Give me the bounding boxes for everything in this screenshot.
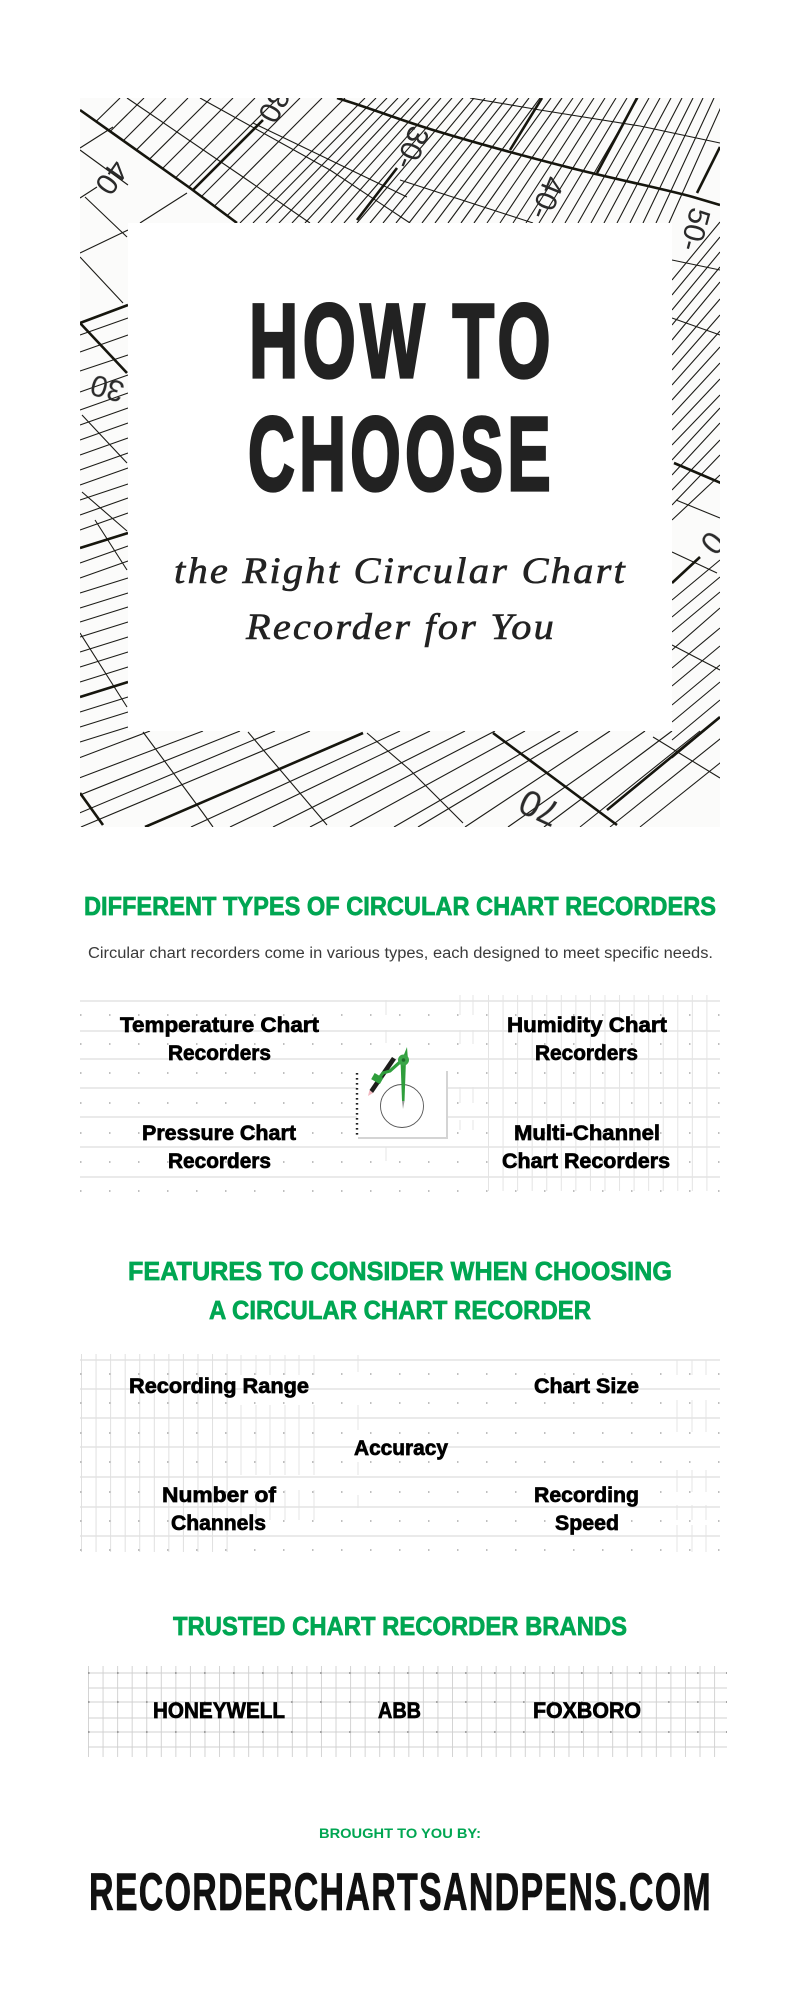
item: temperature chart recorders	[120, 1014, 319, 1065]
item: chart size: Chart Size	[534, 1375, 639, 1398]
heading: different types: DIFFERENT TYPES OF CIRCULAR CHART RECORDERS	[84, 891, 716, 921]
photo digits printed on the chart: 50-	[673, 204, 716, 255]
subtitle	[174, 551, 627, 648]
brand: foxboro: FOXBORO	[533, 1698, 641, 1723]
photo digits printed on the chart: 30-	[388, 121, 435, 174]
brand: honeywell: HONEYWELL	[153, 1698, 285, 1723]
item: pressure chart recorders	[142, 1122, 296, 1173]
panel: types of chart recorders	[80, 995, 720, 1191]
hero: white title panel	[128, 223, 672, 731]
item: recording speed: Recording	[534, 1484, 639, 1507]
heading: features to consider	[128, 1256, 672, 1325]
icon: compass on notepad	[357, 1047, 448, 1139]
item: humidity chart recorders: Humidity Chart	[507, 1014, 667, 1037]
title: how to choose: CHOOSE	[248, 396, 555, 513]
item: temperature chart recorders: Recorders	[168, 1042, 271, 1065]
item: humidity chart recorders: Recorders	[535, 1042, 638, 1065]
item: recording speed: Speed	[555, 1512, 619, 1535]
hero: chart paper photo frame	[80, 98, 720, 827]
photo digits printed on the chart: 40	[88, 154, 134, 200]
panel: features	[80, 1355, 720, 1552]
item: number of channels	[162, 1484, 277, 1535]
brand: abb: ABB	[378, 1698, 421, 1723]
item: multi-channel chart recorders	[502, 1122, 670, 1173]
item: pressure chart recorders: Pressure Chart	[142, 1122, 296, 1145]
heading: features to consider: FEATURES TO CONSIDER WHEN CHOOSING	[128, 1256, 672, 1286]
item: multi-channel chart recorders: Multi-Channel	[514, 1122, 660, 1145]
heading: trusted brands: TRUSTED CHART RECORDER BRANDS	[173, 1611, 627, 1641]
item: multi-channel chart recorders: Chart Recorders	[502, 1150, 670, 1173]
item: temperature chart recorders: Temperature Chart	[120, 1014, 319, 1037]
item: recording speed	[534, 1484, 639, 1535]
title: how to choose	[248, 283, 555, 513]
item: number of channels: Channels	[171, 1512, 266, 1535]
intro text: Circular chart recorders come in various types, each designed to meet specific needs.	[88, 945, 713, 962]
panel: brands	[88, 1673, 727, 1747]
heading: features to consider: A CIRCULAR CHART RECORDER	[209, 1295, 591, 1325]
title: how to choose: HOW TO	[249, 283, 555, 400]
subtitle: Recorder for You	[245, 607, 556, 648]
photo digits printed on the chart: 40-	[523, 171, 570, 224]
item: humidity chart recorders	[507, 1014, 667, 1065]
photo digits printed on the chart: 30	[251, 83, 296, 128]
photo digits printed on the chart: 30	[87, 368, 128, 408]
photo digits printed on the chart	[87, 83, 732, 835]
photo digits printed on the chart: 0	[693, 525, 732, 561]
item: accuracy: Accuracy	[354, 1437, 448, 1460]
item: number of channels: Number of	[162, 1484, 277, 1507]
photo digits printed on the chart: 70	[513, 781, 566, 835]
item: recording range: Recording Range	[129, 1375, 309, 1398]
credit label: BROUGHT TO YOU BY:	[319, 1825, 481, 1841]
subtitle: the Right Circular Chart	[174, 551, 627, 592]
item: pressure chart recorders: Recorders	[168, 1150, 271, 1173]
